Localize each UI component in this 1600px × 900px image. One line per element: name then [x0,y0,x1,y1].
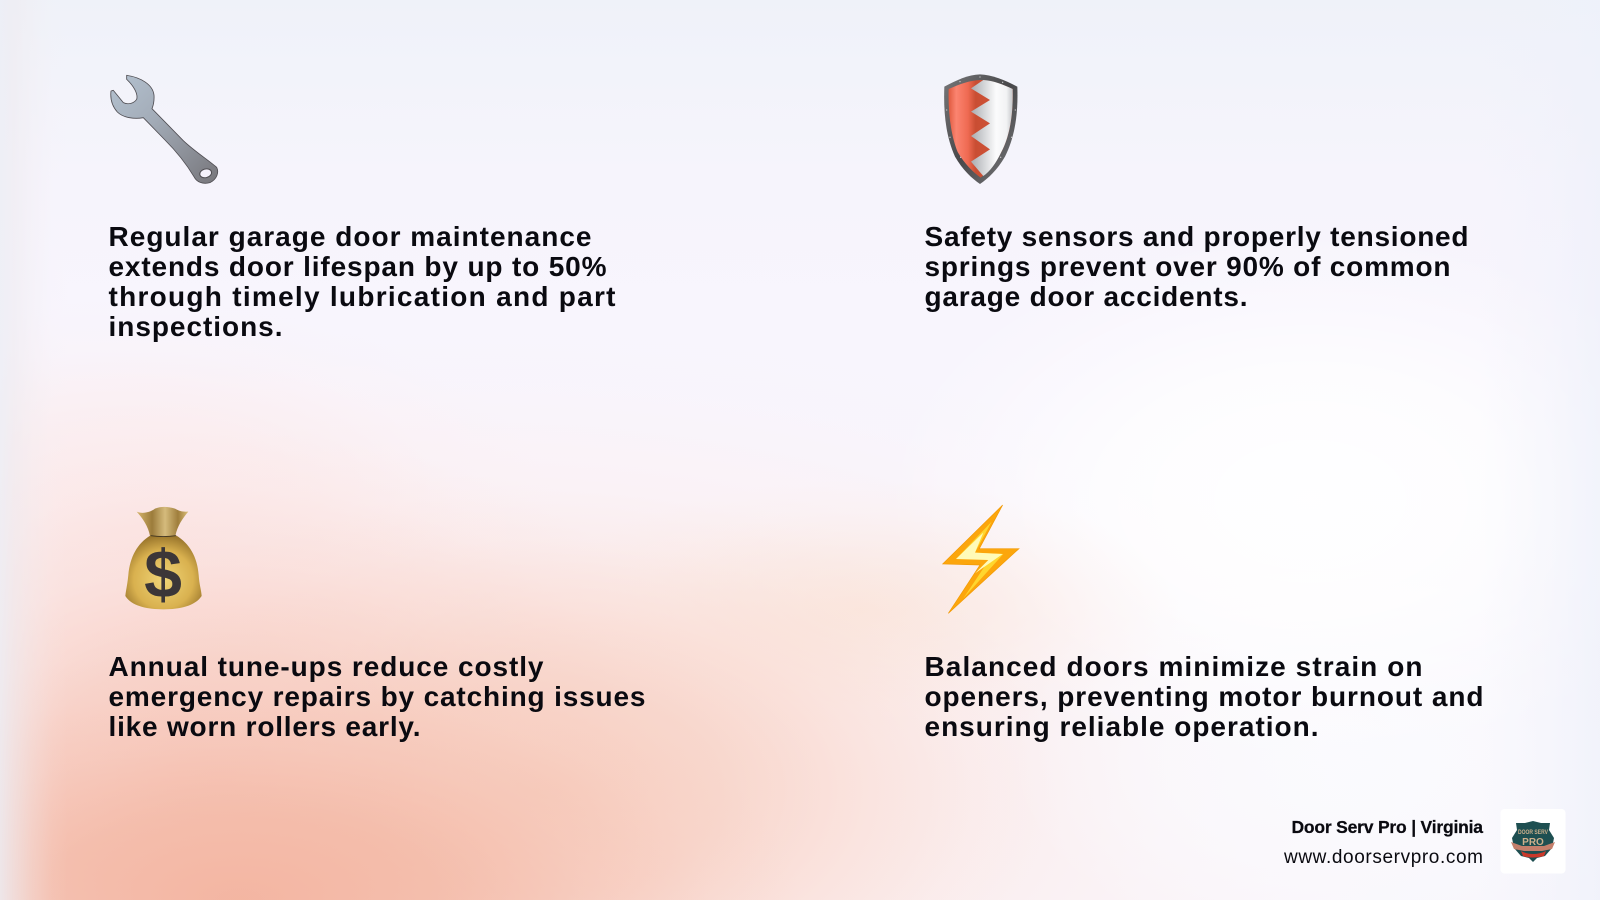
text: opener strain claim: ensuring reliable operation. [924,711,1318,742]
text: lifespan claim: through timely lubrication and part [108,281,616,312]
text: opener strain claim: openers, preventing motor burnout and [924,681,1484,712]
panel: balanced doors [924,505,1484,742]
text: lifespan claim: extends door lifespan by up to 50% [108,251,607,282]
text: accident prevention claim: garage door accidents. [924,281,1248,312]
text: repairs claim: Annual tune-ups reduce costly [108,651,544,682]
panel: safety sensors [924,74,1468,312]
text: opener strain claim [924,651,1484,742]
text: company name: Door Serv Pro | Virginia [1292,817,1483,837]
panel: annual tune-ups [108,507,646,742]
text: website: www.doorservpro.com [1283,847,1483,868]
text: accident prevention claim: Safety sensors and properly tensioned [924,221,1468,252]
footer: brand [1283,809,1566,874]
text: lifespan claim: inspections. [108,311,282,342]
icon: money bag: $ [144,536,182,612]
text: repairs claim: like worn rollers early. [108,711,420,742]
icon: money bag [125,507,202,612]
text: repairs claim: emergency repairs by catching issues [108,681,646,712]
text: opener strain claim: Balanced doors minimize strain on [924,651,1422,682]
logo: Door Serv Pro badge: DOOR SERV [1518,829,1549,836]
text: repairs claim [108,651,646,742]
text: accident prevention claim: springs prevent over 90% of common [924,251,1450,282]
text: lifespan claim [108,221,616,342]
logo: Door Serv Pro badge [1500,809,1566,874]
text: lifespan claim: Regular garage door maintenance [108,221,592,252]
icon: wrench [111,75,218,183]
logo: Door Serv Pro badge: PRO [1522,837,1544,848]
icon: shield [944,74,1017,184]
icon: lightning bolt [943,505,1019,613]
text: accident prevention claim [924,221,1468,312]
panel: maintenance extends lifespan [108,75,616,342]
